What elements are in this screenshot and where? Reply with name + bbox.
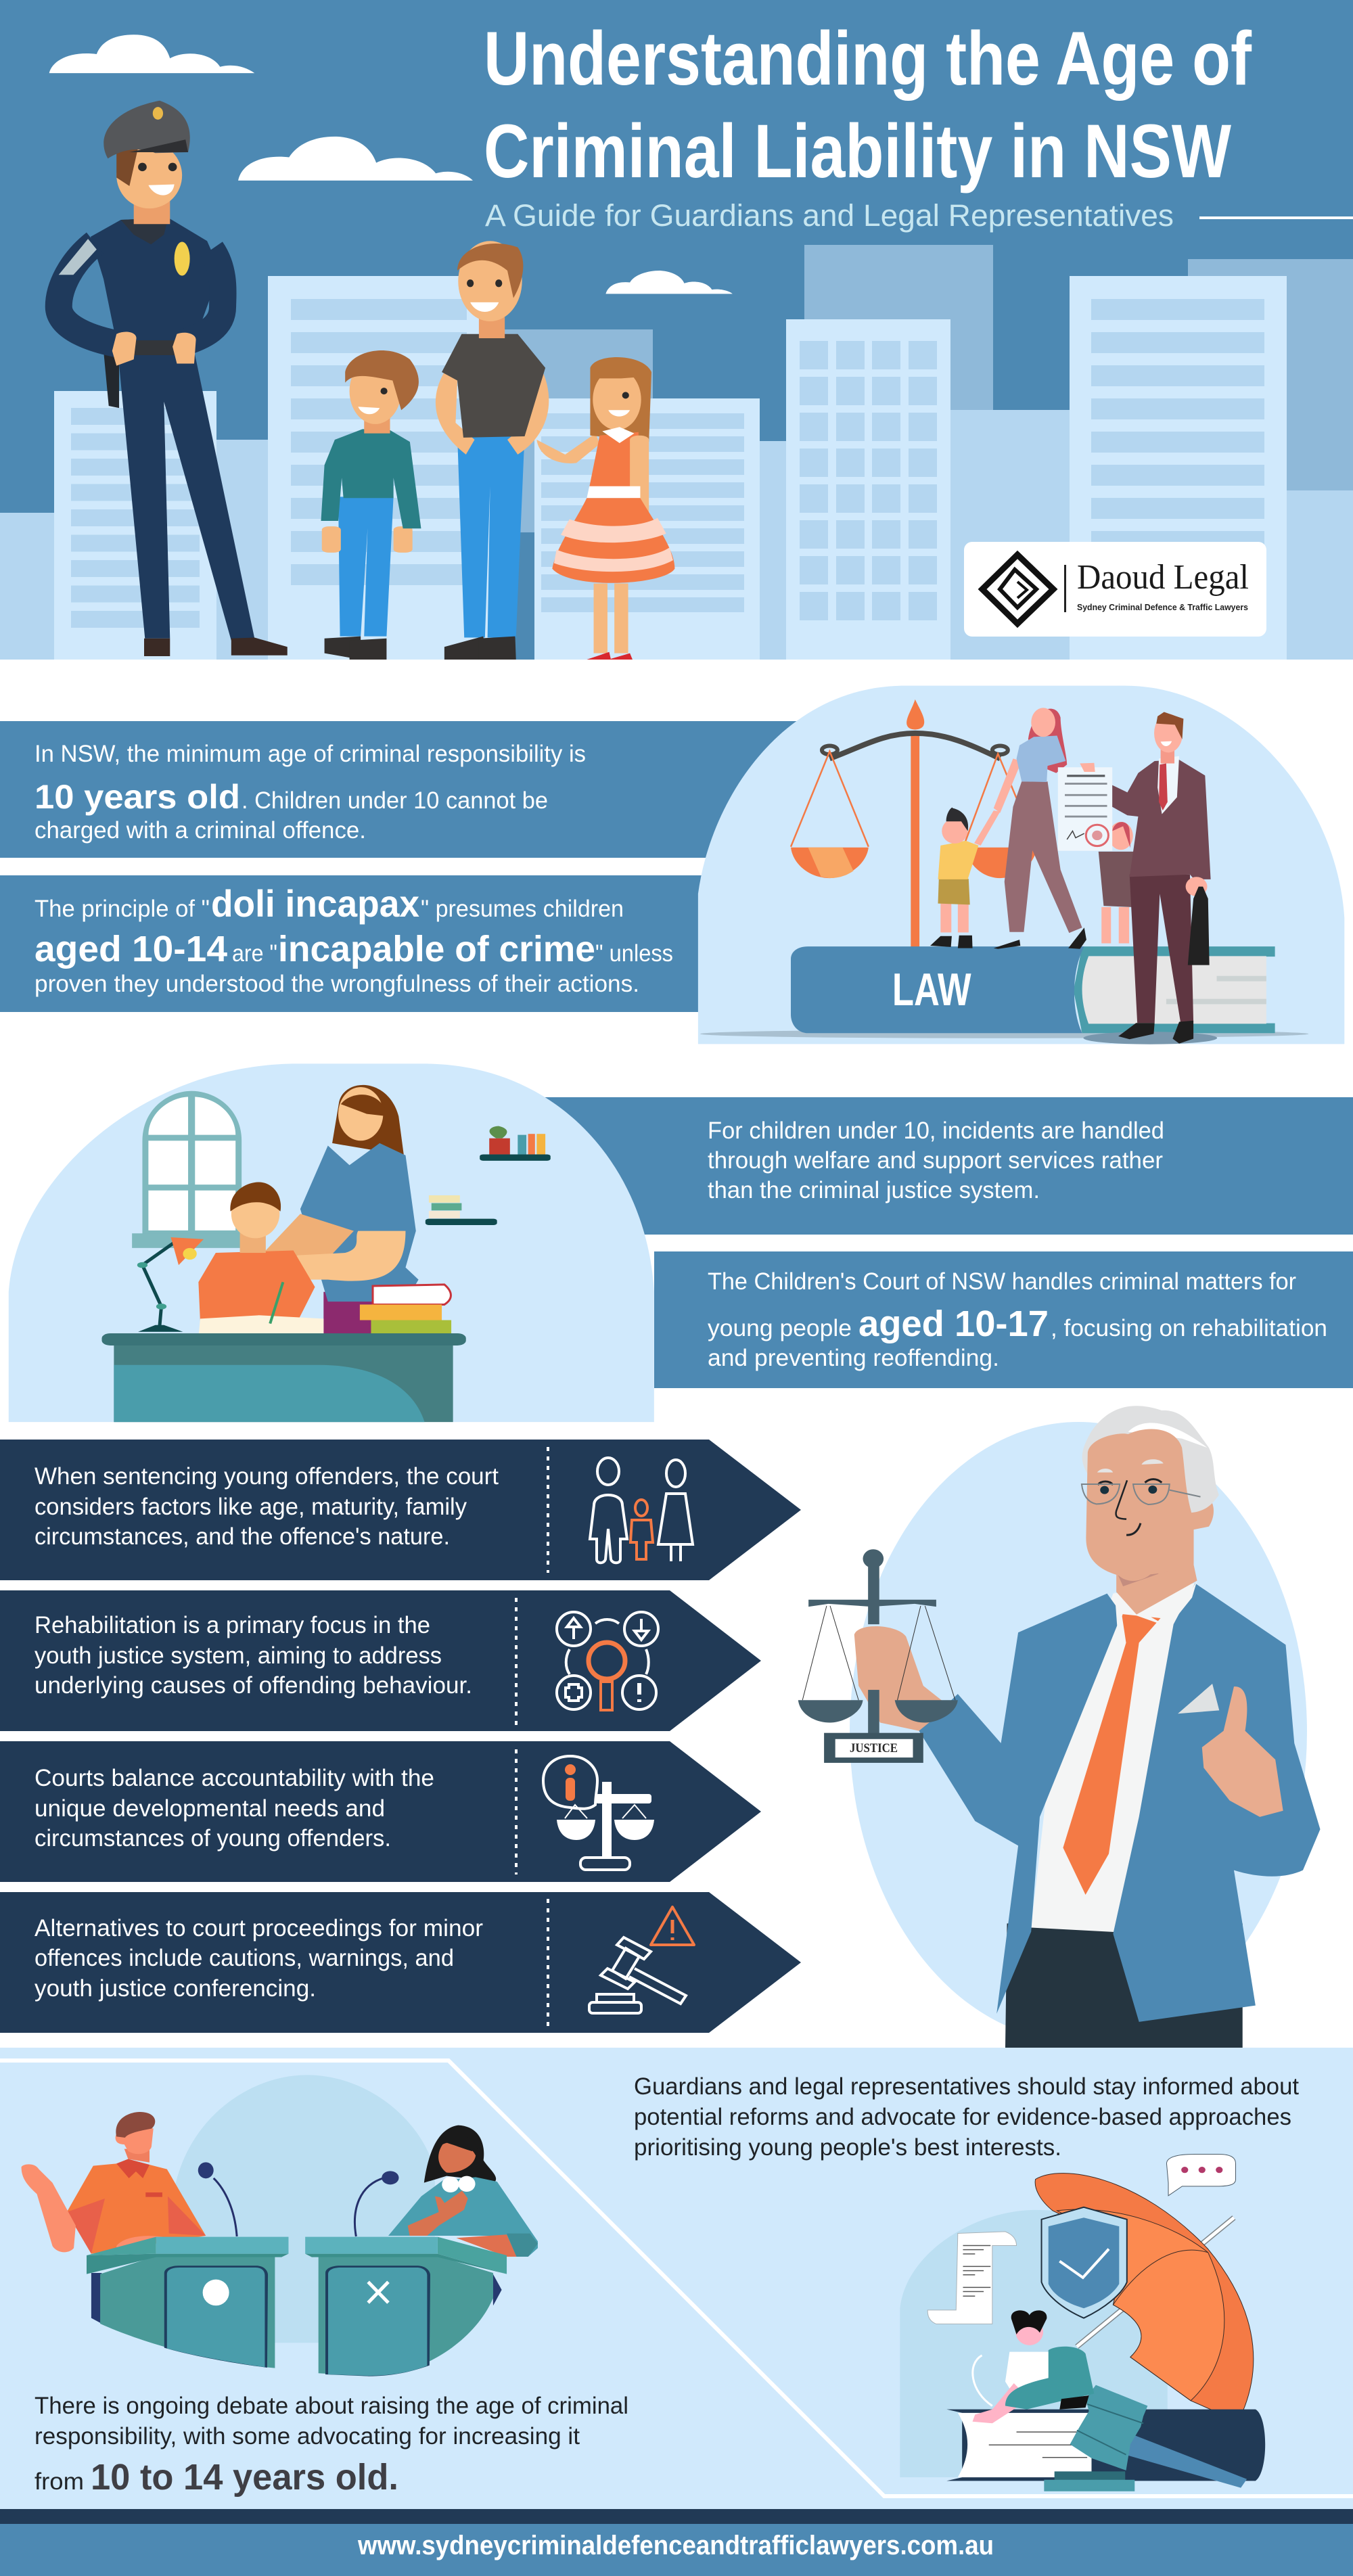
law book: LAW — [892, 964, 971, 1015]
illustration: girl — [536, 357, 674, 660]
illustration: shield, umbrella, girl and gavel — [900, 2154, 1265, 2491]
umbrella handle — [1077, 2217, 1234, 2347]
scales of justice — [798, 1549, 958, 1763]
arrow panel: alternatives: youth justice conferencing. — [35, 1975, 316, 2002]
band: doli incapax: The principle of " — [35, 896, 210, 922]
band: under 10 welfare: than the criminal justice system. — [708, 1177, 1040, 1203]
text: ongoing debate: There is ongoing debate about raising the age of criminal — [35, 2393, 628, 2419]
arrow panel: rehabilitation: Rehabilitation is a primary focus in the — [35, 1612, 430, 1638]
text: guardians advice: prioritising young people's best interests. — [634, 2134, 1061, 2161]
arrow panel: sentencing factors: considers factors like age, maturity, family — [35, 1494, 467, 1520]
speech bubble — [1166, 2154, 1236, 2196]
text: ongoing debate: from — [35, 2468, 84, 2495]
law book — [946, 2410, 1265, 2481]
microphones — [198, 2162, 398, 2236]
shelves — [426, 1126, 551, 1225]
band: minimum age — [0, 721, 839, 858]
arrow panel: sentencing factors — [0, 1440, 801, 1580]
illustration: mother helping child arch — [9, 1063, 654, 1422]
band: doli incapax: " unless — [595, 940, 673, 967]
band: doli incapax: proven they understood the wrongfulness of their actions. — [35, 971, 639, 997]
arrow panel: sentencing factors: circumstances, and the offence's nature. — [35, 1523, 450, 1550]
icon: balance with info — [543, 1756, 654, 1870]
panel: bottom debate and guardians section — [0, 2048, 1353, 2509]
subtitle: A Guide for Guardians and Legal Representatives — [485, 198, 1174, 233]
band: doli incapax: incapable of crime — [278, 929, 595, 969]
illustration: judge with scales — [798, 1406, 1321, 2050]
shield — [1042, 2207, 1127, 2318]
logo card: Daoud Legal — [1077, 558, 1249, 597]
band: under 10 welfare: For children under 10, incidents are handled — [708, 1118, 1164, 1144]
icon: gavel and warning — [589, 1907, 694, 2013]
judge head — [1082, 1406, 1219, 1629]
band: minimum age: . Children under 10 cannot be — [242, 787, 548, 814]
arrow panel: alternatives: offences include cautions, warnings, and — [35, 1945, 454, 1971]
arrow panel: alternatives — [0, 1892, 801, 2033]
footer website address: www.sydneycriminaldefenceandtrafficlawyers.com.au — [357, 2531, 994, 2560]
arrow panel: accountability: unique developmental needs and — [35, 1795, 385, 1822]
arrow panel: alternatives: Alternatives to court proceedings for minor — [35, 1915, 483, 1941]
arrow panel: rehabilitation: underlying causes of offending behaviour. — [35, 1672, 472, 1699]
icon: family — [590, 1458, 693, 1563]
panel: hero header — [0, 0, 1353, 660]
arrow panel: rehabilitation: youth justice system, aiming to address — [35, 1642, 442, 1669]
boy studying — [198, 1182, 323, 1338]
woman — [994, 708, 1086, 949]
right podium — [305, 2237, 507, 2376]
text: ongoing debate: 10 to 14 years old. — [91, 2457, 398, 2498]
illustration: father — [436, 241, 549, 660]
band: minimum age: 10 years old — [35, 778, 240, 816]
girl behind — [1099, 822, 1134, 943]
umbrella canopy — [1035, 2174, 1254, 2422]
man speaker — [22, 2112, 206, 2254]
band: doli incapax: " presumes children — [421, 896, 624, 922]
band: doli incapax — [0, 875, 744, 1012]
arrow panel: sentencing factors: When sentencing young offenders, the court — [35, 1463, 499, 1490]
footer band — [0, 2509, 1353, 2576]
woman speaker — [388, 2125, 538, 2257]
band: minimum age: charged with a criminal offence. — [35, 817, 366, 844]
window — [132, 1091, 246, 1248]
law book — [791, 946, 1275, 1033]
book stack — [360, 1285, 451, 1335]
illustration: boy — [321, 350, 421, 660]
arrow panel: rehabilitation — [0, 1590, 761, 1731]
illustration: police officer — [59, 101, 288, 656]
arrow panel: accountability: Courts balance accountability with the — [35, 1765, 434, 1791]
text: ongoing debate — [35, 2393, 628, 2498]
gavel — [1044, 2385, 1247, 2491]
text: guardians advice — [634, 2073, 1299, 2161]
band: under 10 welfare: through welfare and support services rather — [708, 1147, 1163, 1174]
judge body — [919, 1584, 1321, 2050]
scales — [791, 699, 1037, 947]
clouds — [49, 34, 733, 294]
icon: magnifier with arrows — [557, 1612, 658, 1710]
boy — [930, 808, 1000, 948]
left podium — [87, 2237, 288, 2368]
desk — [102, 1333, 466, 1422]
text: guardians advice: Guardians and legal representatives should stay informed about — [634, 2073, 1299, 2100]
band: Children's Court — [654, 1251, 1353, 1388]
band: doli incapax: aged 10-14 — [35, 929, 227, 969]
band: Children's Court: aged 10-17 — [858, 1304, 1049, 1344]
plaque label: JUSTICE — [850, 1741, 898, 1755]
document — [1058, 763, 1112, 851]
band: minimum age: In NSW, the minimum age of criminal responsibility is — [35, 741, 586, 767]
text: guardians advice: potential reforms and advocate for evidence-based approaches — [634, 2104, 1291, 2130]
illustration: debate podiums — [22, 2075, 538, 2376]
scroll — [927, 2232, 1017, 2324]
city skyline background — [0, 245, 1353, 660]
band: Children's Court: , focusing on rehabilitation — [1051, 1315, 1327, 1341]
band: Children's Court: and preventing reoffending. — [708, 1345, 999, 1371]
seated girl — [972, 2310, 1094, 2423]
logo card — [964, 542, 1266, 637]
logo card: Sydney Criminal Defence & Traffic Lawyers — [1077, 602, 1248, 612]
man in suit — [1083, 712, 1217, 1044]
mother — [259, 1085, 419, 1336]
title — [484, 16, 1252, 193]
arrow panel: accountability — [0, 1741, 761, 1882]
lamp — [137, 1237, 204, 1332]
band: Children's Court: young people — [708, 1315, 852, 1341]
arrow panel: accountability: circumstances of young offenders. — [35, 1825, 391, 1852]
logo mark — [982, 555, 1053, 624]
band: doli incapax: doli incapax — [211, 882, 419, 925]
illustration: law arch panel — [698, 686, 1344, 1044]
text: ongoing debate: responsibility, with some advocating for increasing it — [35, 2423, 580, 2450]
band: under 10 welfare — [541, 1097, 1353, 1235]
band: doli incapax: are " — [232, 940, 277, 967]
band: Children's Court: The Children's Court of NSW handles criminal matters for — [708, 1268, 1296, 1295]
